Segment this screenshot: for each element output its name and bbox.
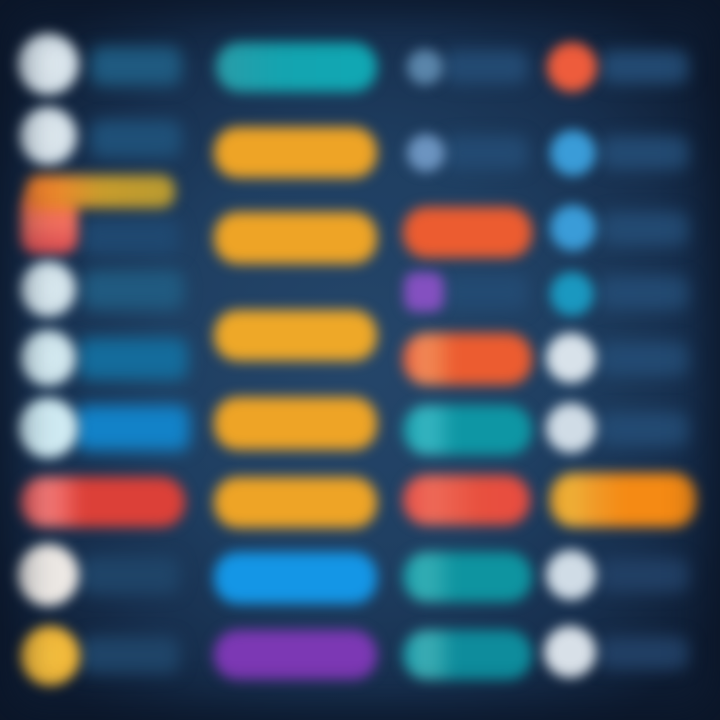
purple bar [214, 630, 377, 680]
icon: white circle 2 [546, 403, 596, 453]
icon: grey-blue circle 1 [407, 49, 443, 85]
icon: grey-blue circle 2 [407, 134, 445, 172]
row bar: dark blue 4 [82, 270, 184, 310]
red bar [20, 477, 185, 527]
row bar: dark 9 [598, 636, 690, 670]
orange bar 2 [214, 212, 377, 264]
panel: column 3 [393, 42, 542, 688]
icon: purple square [404, 272, 444, 312]
red bar [403, 475, 530, 525]
row bar: dark 1 [443, 50, 528, 84]
gold label bar [25, 175, 175, 208]
teal bar 1 [403, 405, 532, 455]
row bar: dark blue 3 [82, 218, 180, 256]
icon: white circle 3 [546, 550, 596, 600]
icon: red tile [20, 192, 78, 254]
panel: column 2 [204, 34, 387, 688]
row bar: dark 3 [600, 212, 690, 246]
icon: white circle 1 [17, 33, 79, 95]
row bar: dark 4 [440, 274, 528, 310]
row bar: blue 5 [78, 338, 188, 380]
row bar: dark blue 9 [80, 636, 180, 674]
icon: red circle [547, 42, 597, 92]
panel: column 4 [534, 33, 706, 687]
icon: white circle 4 [544, 626, 596, 678]
icon: blue circle 1 [550, 130, 596, 176]
row bar: dark blue 1 [90, 46, 182, 86]
icon: teal circle [550, 272, 594, 316]
orange bar [550, 473, 697, 527]
teal bar 2 [403, 552, 532, 602]
teal bar [216, 42, 377, 92]
row bar: dark 1 [600, 50, 690, 84]
row bar: dark blue 2 [90, 120, 182, 158]
row bar: dark 2 [443, 136, 528, 170]
row bar: dark 5 [598, 342, 690, 376]
row bar: dark 6 [598, 412, 690, 446]
orange-red bar 2 [403, 333, 532, 385]
orange bar 4 [214, 397, 377, 450]
row bar: dark 2 [600, 136, 690, 170]
orange-red bar 1 [403, 207, 532, 258]
icon: blue circle 2 [550, 205, 596, 251]
panel: column 1 [9, 24, 200, 695]
icon: white circle 1 [546, 333, 596, 383]
orange bar 1 [214, 127, 377, 178]
orange bar 3 [214, 310, 377, 361]
row bar: dark 4 [598, 276, 690, 310]
blue bar [214, 552, 377, 604]
orange bar 5 [214, 477, 377, 528]
row bar: dark 8 [598, 558, 690, 592]
icon: yellow circle [20, 626, 80, 686]
icon: white circle 5 [20, 330, 76, 386]
icon: white circle 8 [17, 544, 79, 606]
icon: white circle 2 [19, 107, 77, 165]
teal bar 3 [403, 630, 532, 680]
icon: pale cyan circle 6 [18, 398, 78, 458]
row bar: dark blue 8 [80, 556, 180, 594]
row bar: bright blue 6 [75, 405, 190, 451]
icon: white circle 4 [20, 261, 76, 317]
